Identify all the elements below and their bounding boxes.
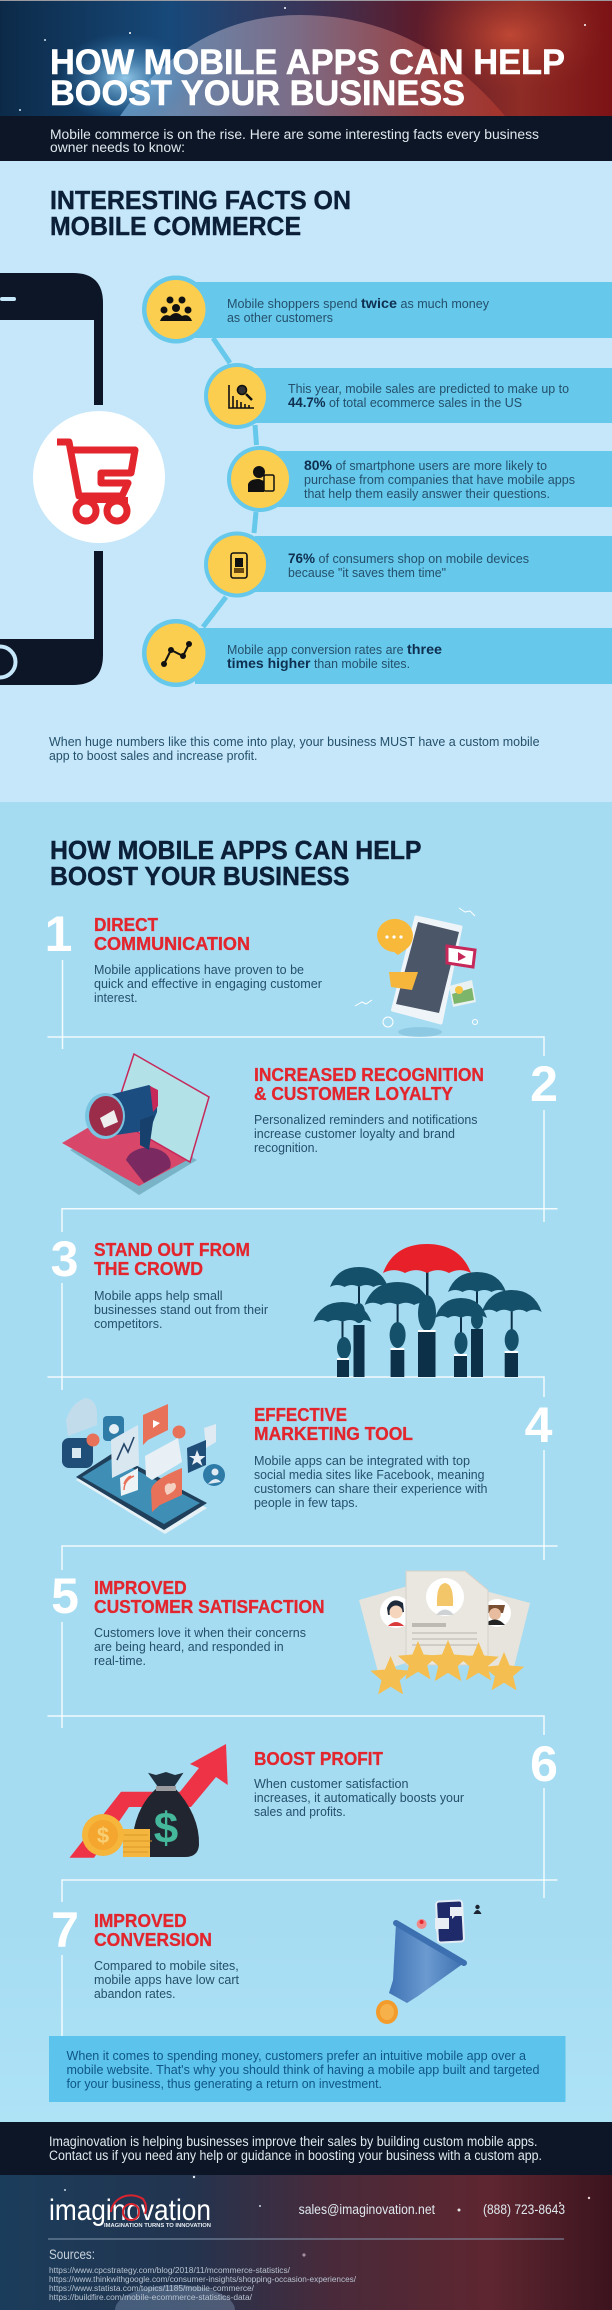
logo: IMAGINATION TURNS TO INNOVATION xyxy=(104,2223,211,2229)
icon: person with phone xyxy=(248,466,274,492)
heading: how mobile apps help: HOW MOBILE APPS CAN HELP xyxy=(50,837,422,865)
step 4 title: MARKETING TOOL xyxy=(254,1424,413,1444)
step 4 title xyxy=(254,1405,413,1444)
step 2 title: INCREASED RECOGNITION xyxy=(254,1065,484,1085)
text: fact 3: 80% xyxy=(304,457,333,473)
step 1 text: Mobile applications have proven to be xyxy=(94,962,304,977)
dollar sign on bag: $ xyxy=(154,1804,178,1853)
dollar sign on coin: $ xyxy=(97,1823,109,1848)
step 2 title xyxy=(254,1065,484,1104)
step 7 title: IMPROVED xyxy=(94,1911,187,1931)
contact band: Imaginovation is helping businesses improve their sales by building custom mobile apps. xyxy=(49,2134,538,2149)
text: fact 5: three xyxy=(407,641,442,657)
fact 2 xyxy=(204,363,612,429)
step 2 text: recognition. xyxy=(254,1140,318,1155)
step 3: stand out xyxy=(51,1231,542,1377)
step 2 text xyxy=(254,1112,478,1155)
step 5: customer satisfaction xyxy=(51,1568,530,1694)
step 5 title: IMPROVED xyxy=(94,1578,187,1598)
contact details: sales@imaginovation.net xyxy=(299,2202,435,2217)
text: fact 5: times higher xyxy=(227,655,311,671)
step 4 text: social media sites like Facebook, meaning xyxy=(254,1467,484,1482)
footer xyxy=(0,2175,612,2310)
heading: how mobile apps help: BOOST YOUR BUSINESS xyxy=(50,863,350,891)
number 5: 5 xyxy=(51,1568,79,1624)
text: fact 5: Mobile app conversion rates are xyxy=(227,642,404,657)
closing statement xyxy=(49,734,540,763)
step 3 title: THE CROWD xyxy=(94,1259,203,1279)
contact details xyxy=(299,2202,565,2217)
phone illustration with cart xyxy=(0,273,165,685)
fact 5 xyxy=(142,619,612,687)
step 7 text: Compared to mobile sites, xyxy=(94,1958,239,1973)
illustration: review cards with five stars xyxy=(359,1571,530,1694)
step 7 title: CONVERSION xyxy=(94,1930,212,1950)
intro band: Mobile commerce is on the rise. Here are some interesting facts every business xyxy=(50,127,539,142)
sources: https://www.thinkwithgoogle.com/consumer-insights/shopping-occasion-experiences/ xyxy=(49,2275,357,2284)
step 5 text xyxy=(94,1625,306,1668)
text: fact 1: twice xyxy=(361,295,397,311)
step 1 title: COMMUNICATION xyxy=(94,934,250,954)
step 3 text: Mobile apps help small xyxy=(94,1288,223,1303)
step 1 title: DIRECT xyxy=(94,915,158,935)
step 6 text: increases, it automatically boosts your xyxy=(254,1790,465,1805)
heading: how mobile apps help xyxy=(50,837,422,891)
sources: Sources: xyxy=(49,2247,95,2262)
icon: line graph xyxy=(161,641,192,667)
step 2 title: & CUSTOMER LOYALTY xyxy=(254,1084,453,1104)
text: fact 4: 76% xyxy=(288,550,316,566)
fact 4 xyxy=(204,532,612,598)
text: fact 3 xyxy=(304,457,575,501)
main title: BOOST YOUR BUSINESS xyxy=(50,74,465,113)
timeline connectors xyxy=(203,338,256,627)
intro band: owner needs to know: xyxy=(50,140,185,155)
logo: imaginovation xyxy=(49,2194,211,2227)
illustration: money bag and rising arrow xyxy=(70,1744,228,1858)
step 7 text xyxy=(94,1958,239,2001)
step 2 text: increase customer loyalty and brand xyxy=(254,1126,455,1141)
step 7 title xyxy=(94,1911,212,1950)
step 1 text xyxy=(94,962,323,1005)
number 6: 6 xyxy=(530,1736,558,1792)
step 6 text: When customer satisfaction xyxy=(254,1776,408,1791)
step 7: improved conversion xyxy=(51,1900,482,2024)
callout: return on investment xyxy=(49,2036,566,2102)
text: fact 2: of total ecommerce sales in the US xyxy=(329,395,522,410)
callout: return on investment: When it comes to spending money, customers prefer an intuitive mobile app over a xyxy=(66,2048,527,2063)
step 7 text: abandon rates. xyxy=(94,1986,176,2001)
text: fact 5: than mobile sites. xyxy=(314,656,410,671)
text: fact 1: as much money xyxy=(400,296,489,311)
text: fact 3: that help them easily answer their questions. xyxy=(304,486,550,501)
step 5 title xyxy=(94,1578,325,1617)
icon: phone with shopping bag xyxy=(231,553,247,578)
step 6: boost profit xyxy=(70,1736,558,1858)
callout: return on investment: for your business, thus generating a return on investment. xyxy=(66,2076,382,2091)
step 3 title xyxy=(94,1240,250,1279)
text: fact 2: This year, mobile sales are predicted to make up to xyxy=(288,381,569,396)
step 1 text: quick and effective in engaging customer xyxy=(94,976,323,991)
intro band xyxy=(0,116,612,161)
hero banner xyxy=(0,0,612,123)
heading: interesting facts: MOBILE COMMERCE xyxy=(50,213,301,241)
step 2: increased recognition xyxy=(62,1054,558,1195)
sources: https://www.cpcstrategy.com/blog/2018/11/mcommerce-statistics/ xyxy=(49,2266,291,2275)
heading: interesting facts: INTERESTING FACTS ON xyxy=(50,187,351,215)
text: fact 4: of consumers shop on mobile devices xyxy=(318,551,529,566)
timeline frame lines xyxy=(48,960,558,2036)
step 3 title: STAND OUT FROM xyxy=(94,1240,250,1260)
step 5 text: Customers love it when their concerns xyxy=(94,1625,306,1640)
step 3 text: competitors. xyxy=(94,1316,162,1331)
step 1 title xyxy=(94,915,250,954)
main title xyxy=(50,43,565,113)
icon: group of people xyxy=(160,296,192,321)
contact details: (888) 723-8643 xyxy=(483,2202,565,2217)
step 4 text: Mobile apps can be integrated with top xyxy=(254,1453,470,1468)
illustration: umbrellas with one red xyxy=(314,1244,542,1377)
text: fact 5 xyxy=(227,641,442,671)
text: fact 1: Mobile shoppers spend xyxy=(227,296,358,311)
callout: return on investment: mobile website. That's why you should think of having a mobile app built and targeted xyxy=(66,2062,540,2077)
number 2: 2 xyxy=(530,1056,558,1112)
step 4 text: customers can share their experience with xyxy=(254,1481,488,1496)
fact 3 xyxy=(227,446,612,512)
step 4 text xyxy=(254,1453,488,1510)
step 1 text: interest. xyxy=(94,990,138,1005)
closing statement: app to boost sales and increase profit. xyxy=(49,748,258,763)
step 4 text: people in few taps. xyxy=(254,1495,358,1510)
sources: https://buildfire.com/mobile-ecommerce-statistics-data/ xyxy=(49,2293,253,2302)
number 7: 7 xyxy=(51,1902,79,1958)
text: fact 3: of smartphone users are more likely to xyxy=(336,458,547,473)
number 1: 1 xyxy=(45,906,72,962)
step 7 text: mobile apps have low cart xyxy=(94,1972,239,1987)
step 1: direct communication xyxy=(45,906,478,1037)
contact band: Contact us if you need any help or guidance in boosting your business with a custom app. xyxy=(49,2148,542,2163)
number 4: 4 xyxy=(525,1397,553,1453)
text: fact 1: as other customers xyxy=(227,310,333,325)
closing statement: When huge numbers like this come into play, your business MUST have a custom mobile xyxy=(49,734,540,749)
number 3: 3 xyxy=(51,1231,78,1287)
text: fact 1 xyxy=(227,295,489,325)
illustration: smartphone with media icons xyxy=(355,908,478,1037)
icon: chart with magnifier xyxy=(229,385,254,408)
illustration: megaphone on laptop xyxy=(62,1054,209,1195)
text: fact 2 xyxy=(288,381,569,410)
text: fact 3: purchase from companies that have mobile apps xyxy=(304,472,575,487)
heading: interesting facts xyxy=(50,187,351,241)
text: fact 2: 44.7% xyxy=(288,394,326,410)
step 2 text: Personalized reminders and notifications xyxy=(254,1112,478,1127)
step 6 text xyxy=(254,1776,465,1819)
step 4: marketing tool xyxy=(62,1397,553,1534)
text: fact 4 xyxy=(288,550,529,580)
contact band xyxy=(0,2122,612,2175)
step 5 text: are being heard, and responded in xyxy=(94,1639,284,1654)
main title: HOW MOBILE APPS CAN HELP xyxy=(50,43,565,82)
illustration: phone with social icons xyxy=(62,1398,225,1534)
sources xyxy=(48,2238,564,2302)
text: fact 4: because "it saves them time" xyxy=(288,565,446,580)
panel: how mobile apps help xyxy=(0,802,612,2122)
step 5 title: CUSTOMER SATISFACTION xyxy=(94,1597,325,1617)
step 5 text: real-time. xyxy=(94,1653,146,1668)
step 3 text: businesses stand out from their xyxy=(94,1302,269,1317)
step 3 text xyxy=(94,1288,269,1331)
illustration: funnel with phone and coin xyxy=(376,1900,482,2024)
fact 1 xyxy=(142,276,612,344)
sources: https://www.statista.com/topics/1185/mobile-commerce/ xyxy=(49,2284,255,2293)
step 6 text: sales and profits. xyxy=(254,1804,346,1819)
step 6 title: BOOST PROFIT xyxy=(254,1749,383,1769)
step 4 title: EFFECTIVE xyxy=(254,1405,347,1425)
panel: interesting facts xyxy=(0,161,612,802)
